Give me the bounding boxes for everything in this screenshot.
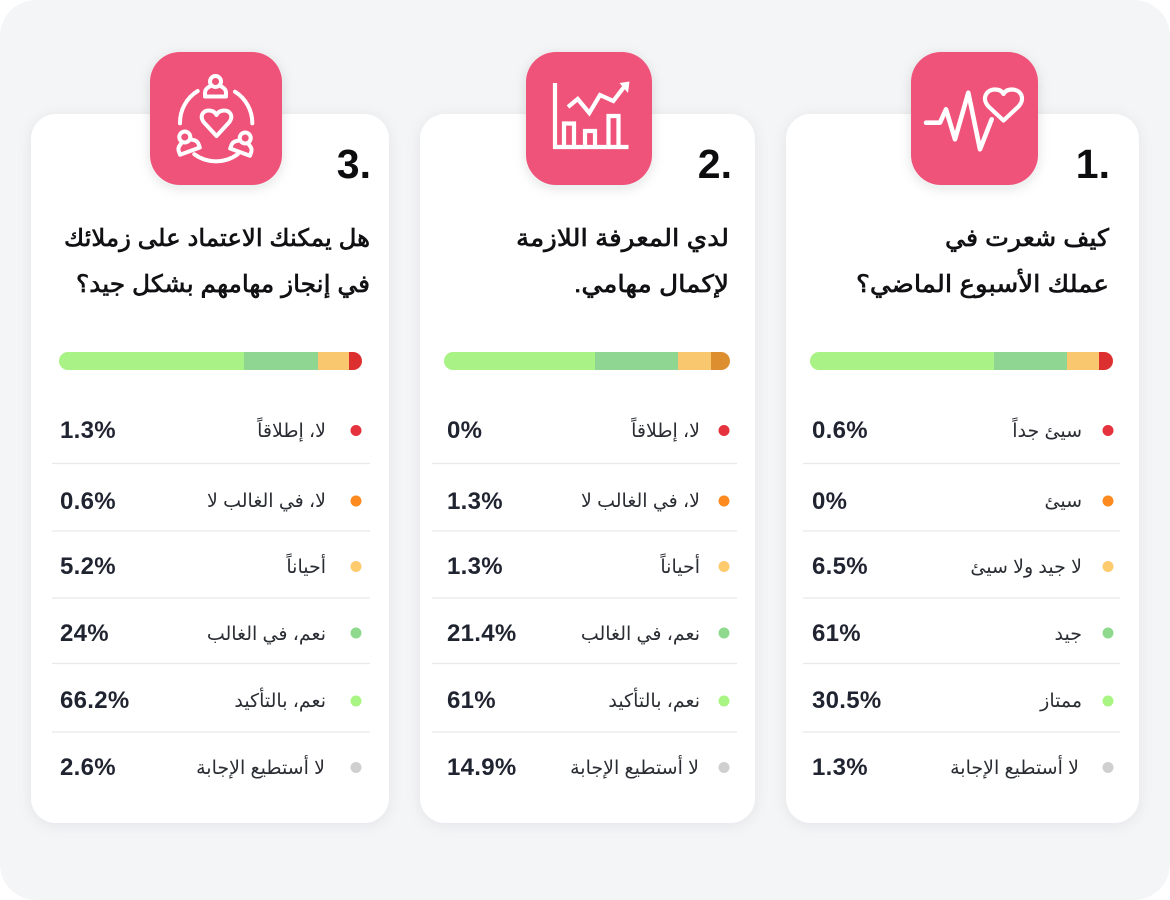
legend list: سيئ جداً	[1012, 417, 1082, 442]
legend list: 14.9%	[447, 754, 517, 781]
legend list: نعم، بالتأكيد	[608, 687, 700, 712]
legend list	[803, 417, 1120, 781]
legend list: لا، إطلاقاً	[257, 417, 326, 443]
icon: heartbeat with heart	[911, 52, 1038, 185]
legend list: لا، في الغالب لا	[207, 491, 326, 512]
legend list: 6.5%	[812, 553, 868, 580]
legend list: 1.3%	[447, 553, 503, 580]
legend list: أحياناً	[286, 553, 326, 578]
legend list: 61%	[447, 687, 496, 714]
legend list: 0.6%	[812, 417, 868, 444]
stacked bar	[810, 352, 1113, 370]
legend list: 1.3%	[60, 417, 116, 444]
question heading	[64, 225, 370, 299]
panel: question 1	[786, 52, 1139, 823]
legend list: جيد	[1055, 624, 1082, 645]
legend list: لا، إطلاقاً	[631, 417, 700, 443]
legend list: 61%	[812, 620, 861, 647]
legend list: 24%	[60, 620, 109, 647]
question number: 2.	[698, 141, 732, 187]
legend list: 0%	[447, 417, 482, 444]
question heading	[516, 225, 729, 298]
icon: team with heart	[150, 52, 282, 185]
question heading: في إنجاز مهامهم بشكل جيد؟	[76, 271, 370, 299]
legend list: لا جيد ولا سيئ	[970, 557, 1082, 578]
legend list: لا أستطيع الإجابة	[950, 755, 1079, 779]
legend list: لا أستطيع الإجابة	[570, 755, 699, 779]
legend list	[432, 417, 737, 781]
stacked bar	[444, 352, 730, 370]
question heading: كيف شعرت في	[945, 225, 1110, 252]
legend list: نعم، في الغالب	[581, 624, 700, 645]
panel: question 2	[420, 52, 755, 823]
icon: growth chart	[526, 52, 652, 185]
legend list: سيئ	[1044, 491, 1082, 512]
legend list: نعم، بالتأكيد	[234, 687, 326, 712]
question heading: لدي المعرفة اللازمة	[516, 225, 729, 252]
legend list: 30.5%	[812, 687, 882, 714]
legend list	[52, 417, 370, 781]
legend list: ممتاز	[1039, 691, 1082, 712]
legend list: 66.2%	[60, 687, 130, 714]
question heading	[856, 225, 1110, 298]
question heading: لإكمال مهامي.	[574, 271, 729, 298]
legend list: لا، في الغالب لا	[581, 491, 700, 512]
legend list: 1.3%	[447, 488, 503, 515]
question heading: عملك الأسبوع الماضي؟	[856, 269, 1109, 298]
stacked bar	[59, 352, 362, 370]
legend list: 0%	[812, 488, 847, 515]
question number: 3.	[337, 141, 371, 187]
legend list: نعم، في الغالب	[207, 624, 326, 645]
legend list: 5.2%	[60, 553, 116, 580]
legend list: لا أستطيع الإجابة	[196, 755, 325, 779]
question number: 1.	[1076, 141, 1110, 187]
panel: question 3	[31, 52, 389, 823]
legend list: 21.4%	[447, 620, 517, 647]
legend list: أحياناً	[660, 553, 700, 578]
question heading: هل يمكنك الاعتماد على زملائك	[64, 225, 370, 252]
legend list: 0.6%	[60, 488, 116, 515]
legend list: 2.6%	[60, 754, 116, 781]
legend list: 1.3%	[812, 754, 868, 781]
